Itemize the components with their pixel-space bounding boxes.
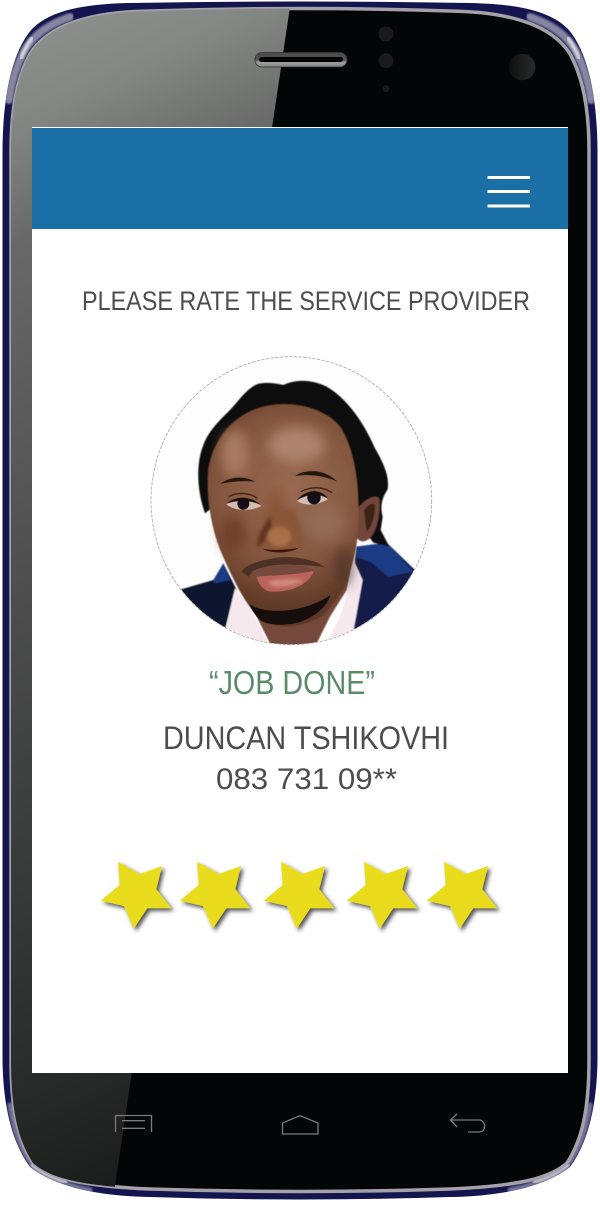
icon: home button <box>282 1116 318 1134</box>
upper lip <box>252 564 313 572</box>
icon: menu button <box>116 1116 152 1132</box>
shirt <box>225 560 363 650</box>
glass reflection <box>0 0 291 1206</box>
phone number: 083 731 09** <box>216 763 397 796</box>
lower lip <box>257 571 314 592</box>
front sensors <box>378 26 394 92</box>
speaker grille <box>255 52 347 67</box>
face highlights <box>222 427 352 587</box>
neck <box>255 570 351 644</box>
front camera <box>509 54 535 80</box>
screen <box>32 127 568 1073</box>
right eye <box>297 488 332 505</box>
jacket <box>180 563 238 628</box>
hair <box>198 381 389 547</box>
icon: back button <box>450 1114 485 1132</box>
header bar <box>32 128 568 229</box>
eyebrows <box>220 471 337 484</box>
face <box>208 404 359 626</box>
ear <box>357 497 380 541</box>
quote label: “JOB DONE” <box>209 664 375 701</box>
moustache <box>242 557 325 577</box>
nose <box>256 510 303 553</box>
heading: PLEASE RATE THE SERVICE PROVIDER <box>82 286 530 316</box>
left eye <box>226 493 262 510</box>
portrait photo <box>151 357 432 650</box>
star rating <box>101 862 497 929</box>
beard <box>249 595 331 625</box>
provider name: DUNCAN TSHIKOVHI <box>163 720 449 756</box>
icon: hamburger menu <box>488 176 530 208</box>
